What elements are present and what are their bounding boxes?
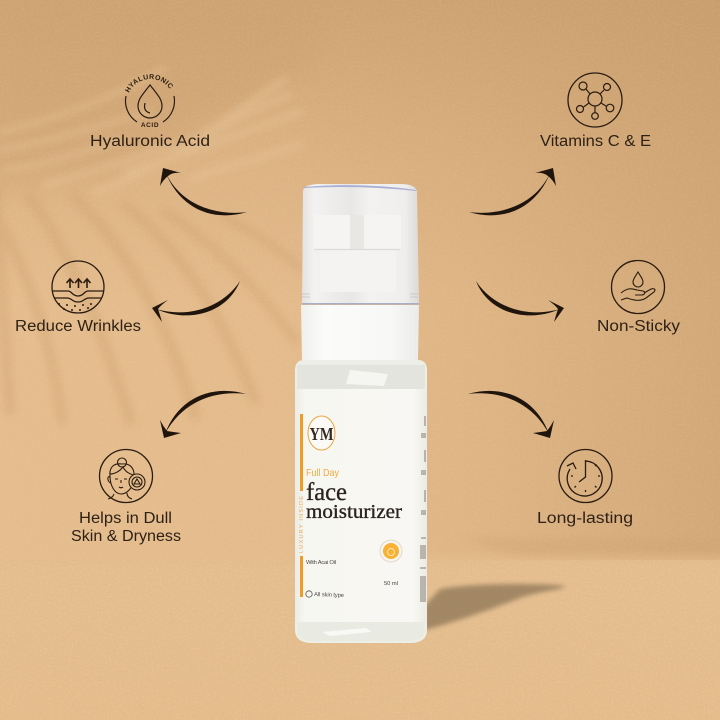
label: Vitamins C & E	[540, 133, 651, 150]
product name	[306, 467, 402, 523]
with acai oil: With Acai Oil	[306, 560, 336, 566]
label	[71, 510, 181, 545]
glass body	[295, 360, 427, 643]
sand floor	[0, 538, 720, 720]
clear cap	[302, 184, 419, 304]
bottle shadow	[424, 584, 566, 630]
white collar	[301, 305, 419, 360]
arrow	[468, 391, 554, 438]
all skin type: All skin type	[314, 592, 344, 599]
icon: hyaluronic acid drop	[124, 74, 176, 129]
feature: Helps in Dull Skin & Dryness	[71, 391, 246, 545]
arrow	[476, 281, 564, 322]
arrow	[152, 281, 240, 322]
icon: clock	[559, 450, 612, 502]
bottle	[295, 184, 427, 643]
product name: Full Day	[306, 467, 340, 479]
feature: Long-lasting	[468, 391, 633, 527]
icon: skin arrows	[52, 261, 104, 313]
pump head	[314, 215, 401, 249]
palm leaf shadows	[0, 0, 320, 420]
icon: molecule	[568, 73, 622, 127]
volume: 50 ml	[384, 581, 398, 587]
icon: hand with drop	[612, 260, 664, 314]
label	[299, 414, 426, 602]
logo: YM	[310, 424, 334, 444]
background wall	[0, 0, 720, 560]
label: Helps in Dull	[79, 510, 172, 527]
product name: moisturizer	[306, 501, 402, 523]
feature: Hyaluronic Acid	[90, 74, 247, 216]
feature: Reduce Wrinkles	[15, 261, 240, 335]
arrow	[469, 168, 556, 215]
dermatologically tested badge	[380, 540, 402, 562]
label: Hyaluronic Acid	[90, 133, 210, 150]
label: Skin & Dryness	[71, 528, 181, 545]
product name: face	[306, 479, 347, 506]
icon: hyaluronic acid drop: HYALURONIC	[125, 74, 173, 93]
feature: Vitamins C & E	[469, 73, 651, 215]
label: Reduce Wrinkles	[15, 318, 141, 335]
orange stripe	[300, 414, 303, 491]
all skin type	[306, 591, 344, 599]
luxury inside text: LUXURY INSIDE	[299, 496, 305, 553]
side fine print	[420, 416, 426, 602]
arrow	[160, 391, 246, 438]
icon: hyaluronic acid drop: ACID	[141, 122, 159, 129]
label: Non-Sticky	[597, 318, 680, 335]
arrow	[160, 168, 247, 215]
logo	[308, 416, 335, 450]
icon: face with badge	[100, 450, 152, 502]
label: Long-lasting	[537, 510, 633, 527]
feature: Non-Sticky	[476, 260, 680, 335]
